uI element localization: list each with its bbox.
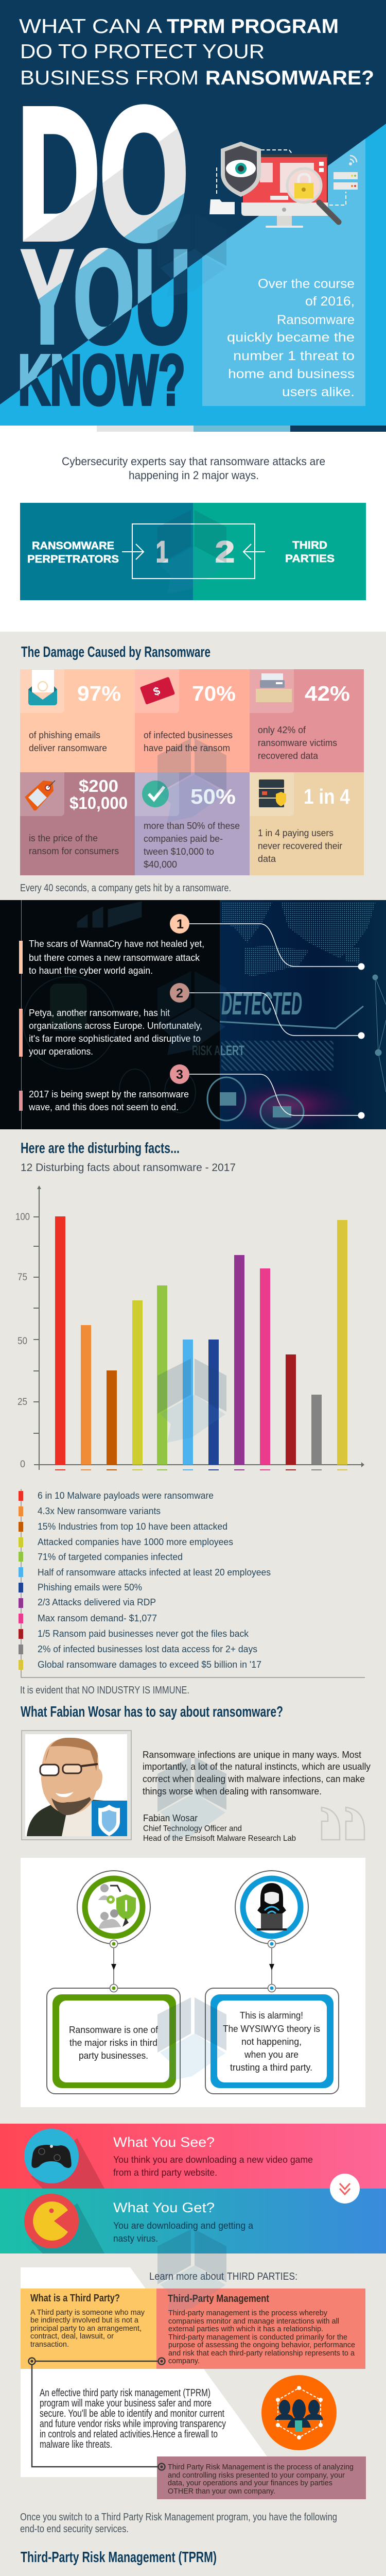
attribution	[143, 1813, 296, 1843]
banner: what you get: nasty virus.	[113, 2233, 158, 2244]
text: phishing emails	[29, 730, 107, 753]
banner: what you get: What You Get?	[113, 2200, 215, 2215]
y axis labels	[15, 1212, 30, 1470]
title	[19, 15, 374, 89]
chart legend: 4.3x New ransomware variants	[38, 1506, 161, 1516]
chart legend: 15% Industries from top 10 have been attacked	[38, 1521, 227, 1532]
quote text: correct when dealing with malware infections, can make	[143, 1774, 365, 1784]
quote text: Ransomware infections are unique in many ways. Most	[143, 1750, 361, 1760]
world dot map	[221, 902, 376, 976]
connector lines	[29, 2358, 165, 2470]
attribution: Chief Technology Officer and	[143, 1824, 242, 1833]
y axis labels: 25	[17, 1397, 27, 1408]
card: major risks: Ransomware is one of	[69, 2025, 159, 2035]
card: alarming: when you are	[244, 2049, 299, 2060]
icon: pac-man	[33, 2201, 68, 2241]
arrow: left	[243, 544, 265, 560]
icon: torn banknote	[140, 676, 175, 705]
text: companies paid: companies paid be-	[144, 834, 223, 844]
title: TPRM PROGRAM	[167, 15, 339, 38]
text: petya: organizations across Europe. Unfortunately,	[29, 1021, 202, 1031]
icon: hacker with laptop	[257, 1883, 287, 1930]
icon: torn banknote: $	[151, 684, 162, 699]
risk alert band: LERT	[220, 1043, 244, 1058]
card: alarming: trusting a third party.	[230, 2062, 312, 2073]
risk alert band	[192, 1041, 334, 1071]
text: end-to-end services: end-to end security services.	[20, 2523, 129, 2535]
stat: 42 percent: 42%	[305, 682, 350, 705]
card: what is a third party: be indirectly involved but is not a	[30, 2316, 139, 2325]
chart axes and ticks	[33, 1185, 364, 1470]
text: effective tprm: in controls and related activities.Hence a firewall to	[40, 2429, 218, 2440]
chart legend: 2/3 Attacks delivered via RDP	[38, 1597, 156, 1607]
stat: 97 percent: 97%	[77, 682, 121, 705]
connector 3	[170, 1064, 364, 1119]
quote text: importantly, a lot of the natural instincts, which are usually	[143, 1761, 371, 1772]
intro paragraph: of 2016,	[305, 294, 355, 309]
big headline: do you know	[17, 69, 191, 420]
text: wannacry: to haunt the cyber world again.	[29, 965, 153, 976]
intro paragraph: users alike.	[282, 385, 355, 399]
colour strip under hero	[0, 426, 386, 632]
text: companies paid	[144, 821, 240, 870]
big headline: do you know: DO	[17, 69, 188, 278]
stat: 1 in 4: 1 in 4	[304, 785, 350, 808]
text: petya	[19, 1008, 202, 1057]
text: petya: Petya, another ransomware, has hit	[29, 1008, 170, 1018]
text: phishing emails: deliver ransomware	[29, 743, 107, 753]
learn more heading: Learn more about	[149, 2271, 224, 2282]
text: price of ransom: is the price of the	[29, 833, 98, 843]
text: 2017 wave	[19, 1089, 189, 1112]
heading: damage: The Damage Caused by Ransomware	[21, 644, 210, 660]
text: effective tprm	[40, 2387, 226, 2450]
icon: people and shield	[98, 1884, 136, 1929]
learn more heading: THIRD PARTIES:	[227, 2271, 297, 2282]
y axis labels: 100	[15, 1212, 30, 1223]
stat: 70 percent: 70%	[192, 682, 236, 705]
ransomware perpetrators label	[27, 540, 119, 565]
text: petya: your operations.	[29, 1046, 93, 1057]
intro paragraph	[227, 277, 355, 399]
banner: what you see: What You See?	[113, 2134, 215, 2150]
panel: dark ransomware timeline	[0, 900, 386, 1129]
card: third-party management: purpose of assessing the ongoing behavior, performance	[168, 2341, 355, 2349]
note: no industry is immune: It is evident that NO INDUSTRY IS IMMUNE.	[20, 1685, 189, 1696]
learn more heading	[149, 2271, 297, 2282]
banner: what you see	[0, 2124, 386, 2189]
intro paragraph: number 1 threat to	[233, 349, 355, 363]
text: wannacry	[19, 939, 204, 976]
network nodes	[373, 975, 386, 1092]
third parties label	[285, 539, 335, 565]
card: major risks: the major risks in third	[69, 2038, 157, 2048]
card: alarming: not happening,	[241, 2037, 302, 2047]
text: paying users: 1 in 4 paying users	[258, 828, 334, 838]
icon: email	[28, 670, 57, 705]
icon: closing quotes	[322, 1807, 364, 1840]
chart legend: 71% of targeted companies infected	[38, 1552, 183, 1562]
card: tprm definition: and controlling risks presented to your company, your	[168, 2471, 345, 2480]
section background: damage	[0, 632, 386, 900]
panel: third parties explainer	[21, 2267, 366, 2499]
big headline: do you know: KNOW?	[18, 341, 185, 420]
icon: document tray	[256, 673, 292, 702]
panel: two attack routes	[20, 503, 366, 600]
text: price of ransom	[29, 833, 119, 856]
intro statement: Cybersecurity experts say that ransomware attacks are	[62, 455, 325, 468]
icon: team network	[261, 2375, 337, 2450]
intro paragraph: Over the course	[258, 277, 355, 291]
connector 2	[170, 983, 364, 1039]
y axis labels: 0	[20, 1459, 25, 1470]
y axis labels: 75	[17, 1272, 27, 1283]
hero section	[0, 0, 386, 426]
heading: fabian wosar: What Fabian Wosar has to say about ransomware?	[21, 1704, 283, 1720]
title: DO TO PROTECT YOUR	[20, 41, 265, 63]
text: effective tprm: malware like threats.	[40, 2439, 112, 2450]
banner: what you see: from a third party website.	[113, 2167, 217, 2178]
connector 1: 1	[177, 917, 184, 931]
chart legend: Max ransom demand- $1,077	[38, 1613, 157, 1623]
card: alarming: This is alarming!	[240, 2010, 303, 2021]
intro paragraph: home and business	[228, 367, 355, 381]
icon: game controller	[31, 2145, 72, 2168]
trend line	[220, 1006, 363, 1028]
text: companies paid: tween $10,000 to	[144, 846, 214, 857]
connector 2: 2	[176, 986, 183, 1001]
card: tprm definition: Third Party Risk Management is the process of analyzing	[168, 2463, 354, 2471]
connector 1	[170, 914, 364, 970]
chart legend: 2% of infected businesses lost data access for 2+ days	[38, 1644, 257, 1654]
text: wannacry: but there comes a new ransomware attack	[29, 953, 200, 963]
text: infected businesses: have paid the ransom	[144, 743, 230, 753]
chart bars	[55, 1216, 347, 1465]
title: WHAT CAN A	[19, 15, 162, 38]
text: petya: it's far more sophisticated and disruptive to	[29, 1033, 201, 1044]
subheading: 12 disturbing facts: 12 Disturbing facts about ransomware - 2017	[21, 1162, 236, 1174]
text: infected businesses	[144, 730, 233, 753]
intro statement	[62, 455, 325, 482]
text: companies paid: $40,000	[144, 859, 177, 870]
quote text	[143, 1750, 371, 1797]
text: effective tprm: and future vendor risks while improving transparency	[40, 2418, 226, 2430]
attribution: Head of the Emsisoft Malware Research Lab	[143, 1834, 296, 1843]
text: end-to-end services	[20, 2512, 337, 2535]
chart legend: 1/5 Ransom paid businesses never got the files back	[38, 1629, 249, 1639]
connector 3: 3	[176, 1067, 183, 1082]
stat: 50 percent: 50%	[190, 785, 236, 808]
card: major risks: party businesses.	[79, 2050, 148, 2061]
card: what is a third party: principal party to an arrangement,	[30, 2324, 142, 2333]
card: tprm definition	[157, 2456, 366, 2499]
banner: what you get	[0, 2189, 386, 2253]
card: what is a third party: transaction.	[30, 2340, 69, 2349]
card: alarming: The WYSIWYG theory is	[223, 2024, 320, 2034]
text: paying users: data	[258, 854, 276, 864]
text: recovered data: ransomware victims	[258, 738, 337, 748]
title: RANSOMWARE?	[205, 67, 374, 89]
big headline: do you know: YOU	[21, 222, 191, 371]
heading: tprm: Third-Party Risk Management (TPRM)	[21, 2549, 217, 2566]
chart legend: Global ransomware damages to exceed $5 billion in '17	[38, 1659, 261, 1670]
ransomware perpetrators label: PERPETRATORS	[27, 553, 119, 565]
banner: what you get: You are downloading and getting a	[113, 2221, 254, 2231]
text: effective tprm: program will make your business safer and more	[40, 2398, 212, 2409]
icon: check mark	[142, 781, 169, 807]
y axis labels: 50	[17, 1336, 27, 1347]
card: major risks	[47, 1871, 180, 2094]
card: what is a third party: contract, deal, lawsuit, or	[30, 2332, 114, 2341]
chart legend: Attacked companies have 1000 more employees	[38, 1537, 233, 1547]
section background: third parties	[0, 2253, 386, 2576]
numeral 1: 1	[156, 535, 168, 569]
text: effective tprm: An effective third party risk management (TPRM)	[40, 2387, 210, 2399]
card: what is a third party	[21, 2289, 156, 2369]
card: tprm definition: data, your operations and your finances by parties	[168, 2479, 332, 2487]
quote text: things worse when dealing with ransomware.	[143, 1786, 322, 1797]
heading: disturbing facts: Here are the disturbing facts...	[21, 1140, 180, 1157]
intro paragraph: Ransomware	[277, 313, 355, 327]
note: every 40 seconds: Every 40 seconds, a company gets hit by a ransomware.	[20, 883, 231, 894]
card: third-party management	[156, 2289, 365, 2369]
attribution: Fabian Wosar	[143, 1813, 198, 1823]
ransomware perpetrators label: RANSOMWARE	[32, 540, 114, 552]
numeral 2: 2	[215, 535, 235, 569]
risk alert band: RISK A	[192, 1043, 220, 1058]
chart legend	[19, 1489, 365, 1677]
illustration: monitor, shield and padlock	[209, 142, 358, 228]
text: wannacry: The scars of WannaCry have not healed yet,	[29, 939, 204, 949]
card: third-party management: company.	[168, 2357, 200, 2365]
text: recovered data: only 42% of	[258, 725, 306, 735]
card: third-party management: external parties with which it has a relationship.	[168, 2325, 323, 2333]
panel: third party risk cards	[21, 1858, 365, 2107]
stat: 200 to 10000 dollars: $10,000	[69, 793, 128, 812]
stat: 200 to 10000 dollars	[69, 776, 128, 812]
card: third-party management: Third-party management is conducted primarily for the	[168, 2333, 347, 2342]
text: effective tprm: secure. You'll be able to identify and monitor current	[40, 2408, 224, 2419]
card: third-party management: Third-Party Management	[168, 2293, 269, 2304]
chart legend: Phishing emails were 50%	[38, 1582, 142, 1592]
text: companies paid: more than 50% of these	[144, 821, 240, 831]
title: BUSINESS FROM	[20, 67, 199, 89]
stat: 200 to 10000 dollars: $200	[79, 776, 118, 795]
card: what is a third party: What is a Third Party?	[30, 2293, 120, 2304]
icon: chevron badge	[330, 2174, 360, 2204]
card: alarming	[205, 1871, 339, 2094]
chart legend: 6 in 10 Malware payloads were ransomware	[38, 1490, 214, 1501]
icon: price tag	[25, 781, 55, 811]
card: third-party management: and risk that each third-party relationship represents to a	[168, 2349, 355, 2358]
arrow: right	[122, 544, 144, 560]
section background: facts and quote	[0, 1129, 386, 2124]
text: price of ransom: ransom for consumers	[29, 846, 119, 856]
text: 2017 wave: 2017 is being swept by the ransomware	[29, 1089, 189, 1099]
text: paying users: never recovered their	[258, 841, 342, 851]
icon: server and shield	[259, 779, 286, 807]
card: third-party management: Third-party management is the process whereby	[168, 2309, 327, 2317]
text: phishing emails: of phishing emails	[29, 730, 100, 740]
third parties label: PARTIES	[285, 553, 335, 565]
text: recovered data	[258, 725, 337, 761]
intro paragraph: quickly became the	[227, 330, 355, 345]
glow and round icons	[207, 1077, 358, 1129]
third parties label: THIRD	[292, 539, 327, 551]
banner: what you see: You think you are downloading a new video game	[113, 2155, 313, 2165]
text: paying users	[258, 828, 342, 864]
text: recovered data: recovered data	[258, 751, 319, 761]
card: third-party management: companies monitor and manage interactions with all	[168, 2317, 339, 2326]
intro statement: happening in 2 major ways.	[129, 469, 259, 482]
panel: damage statistics grid	[20, 669, 364, 875]
axis colour dashes	[55, 1469, 347, 1470]
card: what is a third party: A Third party is someone who may	[30, 2308, 145, 2317]
portrait: fabian wosar	[22, 1731, 131, 1840]
card: tprm definition: OTHER than your own company.	[168, 2487, 275, 2496]
bar chart	[15, 1185, 364, 1470]
chart legend: Half of ransomware attacks infected at least 20 employees	[38, 1567, 271, 1578]
text: infected businesses: of infected businesses	[144, 730, 233, 740]
text: 2017 wave: wave, and this does not seem to end.	[28, 1102, 179, 1112]
